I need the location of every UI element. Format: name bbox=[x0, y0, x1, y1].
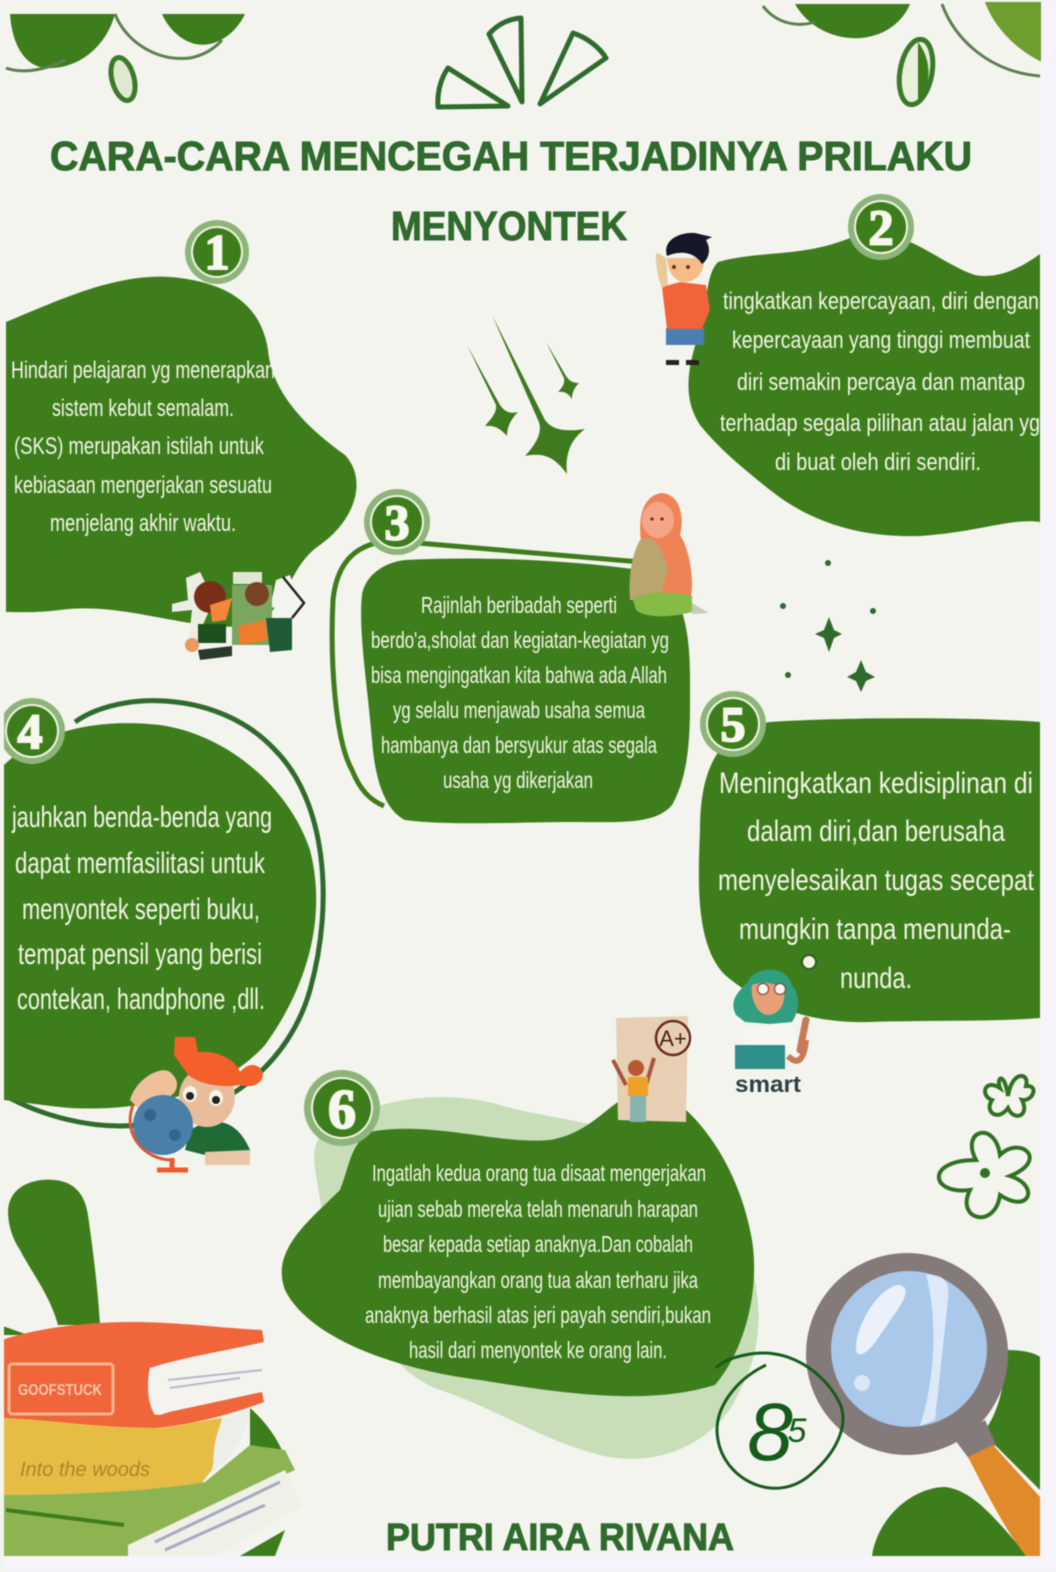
icon: shooting stars bbox=[467, 315, 585, 474]
panel 6 bbox=[282, 1070, 759, 1459]
text 4: contekan, handphone ,dll. bbox=[17, 983, 265, 1016]
text 1: menjelang akhir waktu. bbox=[50, 510, 236, 537]
text 1: kebiasaan mengerjakan sesuatu bbox=[14, 472, 272, 499]
text 4 bbox=[11, 801, 272, 1016]
panel 5 bbox=[699, 691, 1040, 1022]
text 3: yg selalu menjawab usaha semua bbox=[393, 697, 645, 723]
badge 4 bbox=[0, 698, 65, 764]
badge 6: 6 bbox=[328, 1079, 356, 1141]
text 4: tempat pensil yang berisi bbox=[18, 938, 262, 971]
badge 1: 1 bbox=[204, 224, 230, 280]
panel 2 bbox=[688, 194, 1040, 536]
text 3: Rajinlah beribadah seperti bbox=[421, 592, 617, 618]
text 1: Hindari pelajaran yg menerapkan bbox=[11, 357, 275, 384]
text 4: dapat memfasilitasi untuk bbox=[15, 847, 266, 880]
text 6: Ingatlah kedua orang tua disaat mengerjakan bbox=[372, 1160, 706, 1186]
icon: top right leaves bbox=[763, 2, 1042, 107]
icon: books: Into the woods bbox=[20, 1459, 150, 1481]
text 3: hambanya dan bersyukur atas segala bbox=[381, 732, 657, 758]
author: PUTRI AIRA RIVANA bbox=[386, 1517, 734, 1559]
badge 1 bbox=[185, 220, 249, 284]
badge 4: 4 bbox=[18, 703, 42, 759]
text 4: jauhkan benda-benda yang bbox=[11, 801, 272, 834]
text 1 bbox=[11, 357, 275, 537]
badge 2: 2 bbox=[868, 199, 894, 255]
icon: score 85 bbox=[716, 1353, 843, 1488]
icon: girl with globe bbox=[130, 1037, 263, 1170]
icon: smart girl: smart bbox=[735, 1071, 801, 1097]
icon: exam paper bbox=[613, 1016, 690, 1122]
title bbox=[50, 133, 972, 249]
text 6: membayangkan orang tua akan terharu jika bbox=[378, 1267, 698, 1293]
text 5 bbox=[718, 767, 1035, 995]
badge 5: 5 bbox=[720, 696, 746, 752]
text 1: (SKS) merupakan istilah untuk bbox=[14, 433, 265, 460]
icon: books: GOOFSTUCK bbox=[18, 1382, 102, 1399]
text 3: usaha yg dikerjakan bbox=[443, 767, 593, 793]
text 3: bisa mengingatkan kita bahwa ada Allah bbox=[371, 662, 667, 688]
icon: books bbox=[2, 1322, 302, 1556]
panel 1 bbox=[6, 220, 357, 660]
title: CARA-CARA MENCEGAH TERJADINYA PRILAKU bbox=[50, 133, 972, 179]
panel 3 bbox=[332, 489, 690, 823]
text 3 bbox=[371, 592, 669, 793]
title: MENYONTEK bbox=[391, 203, 627, 249]
text 6 bbox=[365, 1160, 711, 1363]
icon: flowers bbox=[939, 1076, 1034, 1217]
text 2 bbox=[720, 288, 1040, 476]
icon: magnifying glass bbox=[806, 1253, 1040, 1556]
badge 6 bbox=[304, 1070, 380, 1146]
icon: smart girl bbox=[733, 955, 816, 1097]
icon: exam paper: A+ bbox=[659, 1026, 687, 1051]
icon: score 85: 8 bbox=[747, 1387, 793, 1478]
icon: top left leaves bbox=[6, 14, 245, 103]
icon: praying girl bbox=[629, 493, 709, 616]
badge 3 bbox=[364, 489, 430, 555]
text 5: nunda. bbox=[840, 962, 912, 995]
icon: students bbox=[172, 572, 304, 660]
badge 2 bbox=[848, 194, 914, 260]
text 3: berdo'a,sholat dan kegiatan-kegiatan yg bbox=[371, 627, 669, 653]
icon: boy bbox=[656, 233, 712, 365]
icon: leaf behind books bbox=[0, 1180, 288, 1556]
icon: score 85: 5 bbox=[788, 1412, 807, 1450]
text 6: hasil dari menyontek ke orang lain. bbox=[409, 1337, 667, 1363]
icon: leaves bottom right bbox=[872, 1350, 1040, 1556]
icon: top burst bbox=[438, 18, 606, 107]
panel 4 bbox=[0, 698, 323, 1126]
icon: sparkles bbox=[780, 560, 876, 692]
text 1: sistem kebut semalam. bbox=[52, 395, 234, 422]
badge 3: 3 bbox=[384, 494, 410, 550]
badge 5 bbox=[700, 691, 766, 757]
text 4: menyontek seperti buku, bbox=[22, 893, 260, 926]
text 2: di buat oleh diri sendiri. bbox=[775, 449, 981, 476]
text 6: besar kepada setiap anaknya.Dan cobalah bbox=[383, 1231, 693, 1257]
text 6: anaknya berhasil atas jeri payah sendiri,bukan bbox=[365, 1302, 711, 1328]
text 6: ujian sebab mereka telah menaruh harapan bbox=[378, 1196, 698, 1222]
